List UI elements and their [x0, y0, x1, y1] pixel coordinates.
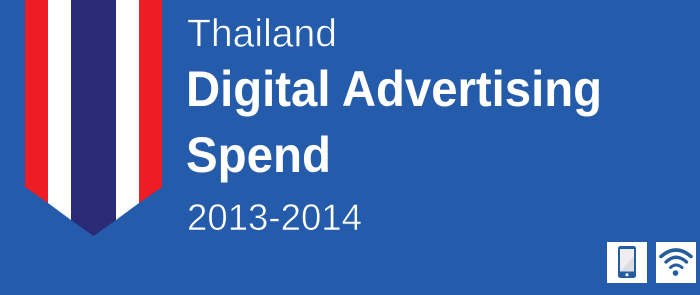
heading: Spend: Spend [186, 127, 331, 183]
icon: mobile phone [607, 242, 647, 283]
title: Thailand: Thailand [187, 12, 337, 56]
icon: Thai flag ribbon [25, 0, 162, 236]
text: date range: 2013-2014 [187, 197, 362, 238]
icon: wifi signal [656, 242, 696, 283]
heading: Digital Advertising: Digital Advertising [186, 61, 602, 117]
